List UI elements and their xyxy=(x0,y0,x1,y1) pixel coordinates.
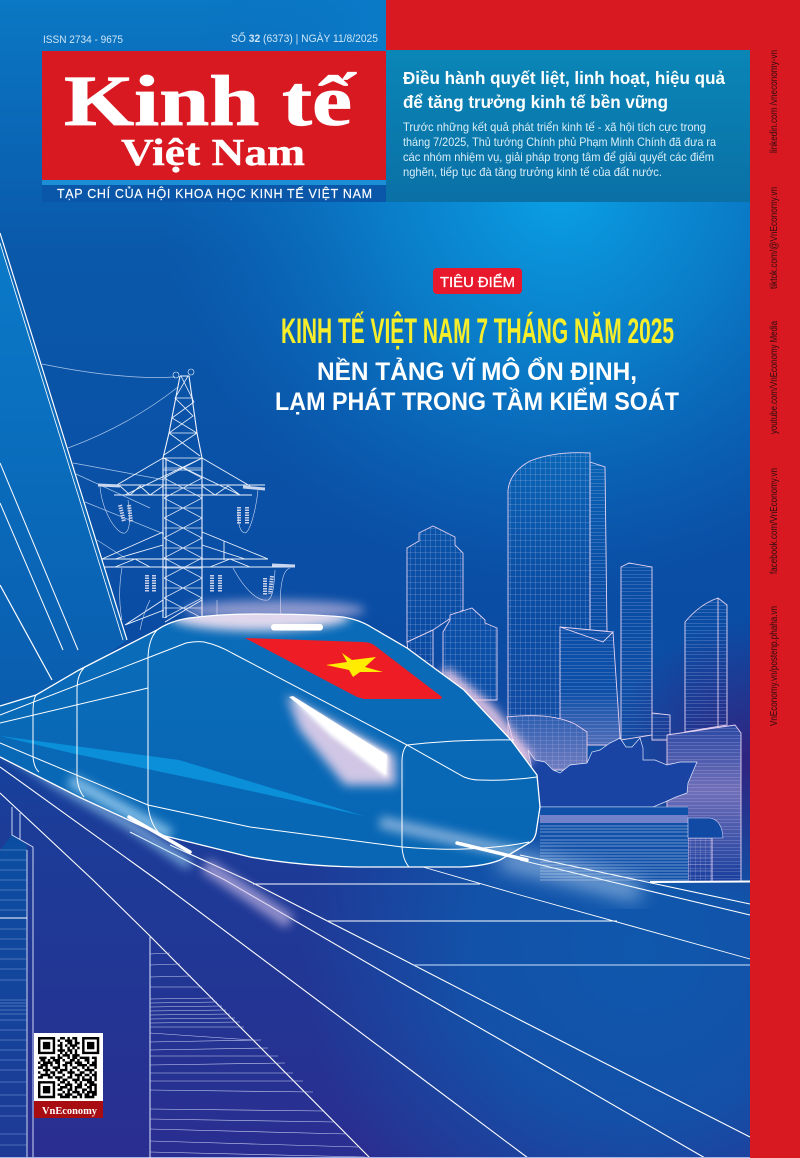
tagline: TẠP CHÍ CỦA HỘI KHOA HỌC KINH TẾ VIỆT NAM xyxy=(57,186,372,201)
lower deck hatching xyxy=(150,936,365,1158)
pink glow above train roof xyxy=(185,600,529,762)
far right tower xyxy=(685,598,727,732)
logo subtitle: Việt Nam xyxy=(121,132,305,174)
social links: linkedin.com /vneconomy-vn xyxy=(769,50,780,153)
flag star xyxy=(326,653,383,677)
qr code xyxy=(34,1033,103,1118)
inner train glows xyxy=(70,603,540,858)
article summary xyxy=(403,120,716,179)
featured article panel xyxy=(386,50,750,202)
article summary: các nhóm nhiệm vụ, giải pháp trọng tâm để giải quyết các điểm xyxy=(403,150,714,164)
headlight xyxy=(286,695,396,785)
qr code: VnEconomy xyxy=(42,1106,97,1117)
issue number and date: SỐ 32 (6373) | NGÀY 11/8/2025 xyxy=(231,31,378,45)
right red strip xyxy=(750,0,800,1158)
social links xyxy=(769,50,780,726)
article headline xyxy=(403,68,725,112)
city skyline buildings xyxy=(407,453,741,882)
left lower tower xyxy=(443,608,497,700)
curved skyscraper xyxy=(508,453,590,740)
panel lines xyxy=(0,630,537,867)
glow under the train xyxy=(0,745,640,922)
roof light xyxy=(271,624,323,630)
waterfront lines xyxy=(540,807,723,882)
flag on train xyxy=(245,638,442,699)
masthead xyxy=(42,51,386,202)
focus badge: TIÊU ĐIỂM xyxy=(440,273,515,291)
light streaks xyxy=(129,817,527,860)
sub headline: NỀN TẢNG VĨ MÔ ỔN ĐỊNH, xyxy=(317,356,637,386)
bridge pylon at left xyxy=(0,233,127,715)
article summary: tháng 7/2025, Thủ tướng Chính phủ Phạm Minh Chính đã đưa ra xyxy=(403,135,716,149)
social links: tiktok.com/@VnEconomy.vn xyxy=(769,187,780,289)
railway viaduct left block xyxy=(0,807,33,1158)
tree silhouette xyxy=(528,738,697,807)
angled glass tower xyxy=(560,627,620,745)
article summary: nghẽn, tiếp tục đà tăng trưởng kinh tế của đất nước. xyxy=(403,165,662,179)
curved podium xyxy=(507,716,587,770)
power lines xyxy=(42,364,178,558)
issn: ISSN 2734 - 9675 xyxy=(43,34,123,46)
low wide block xyxy=(667,725,741,882)
top red band xyxy=(386,0,800,50)
article headline: Điều hành quyết liệt, linh hoạt, hiệu quả xyxy=(403,68,725,88)
social links: VnEconomy.vn/postenp.phaha.vn xyxy=(769,606,780,726)
high speed train xyxy=(0,603,540,867)
focus badge xyxy=(433,268,522,294)
train outline xyxy=(0,614,540,867)
rail and deck lines xyxy=(0,767,750,1158)
left twin tower xyxy=(407,526,463,690)
social links: facebook.com/VnEconomy.vn xyxy=(769,468,780,574)
electricity pylon xyxy=(98,369,295,630)
tall narrow tower xyxy=(621,563,652,740)
social links: youtube.com/VnEconomy Media xyxy=(769,321,780,434)
body stripe xyxy=(0,736,364,816)
article summary: Trước những kết quả phát triển kinh tế - xã hội tích cực trong xyxy=(403,120,706,134)
sub headline: LẠM PHÁT TRONG TẦM KIỂM SOÁT xyxy=(275,387,679,416)
logo title: Kinh tế xyxy=(64,61,357,141)
sub headline xyxy=(275,356,679,416)
article headline: để tăng trưởng kinh tế bền vững xyxy=(403,92,668,112)
